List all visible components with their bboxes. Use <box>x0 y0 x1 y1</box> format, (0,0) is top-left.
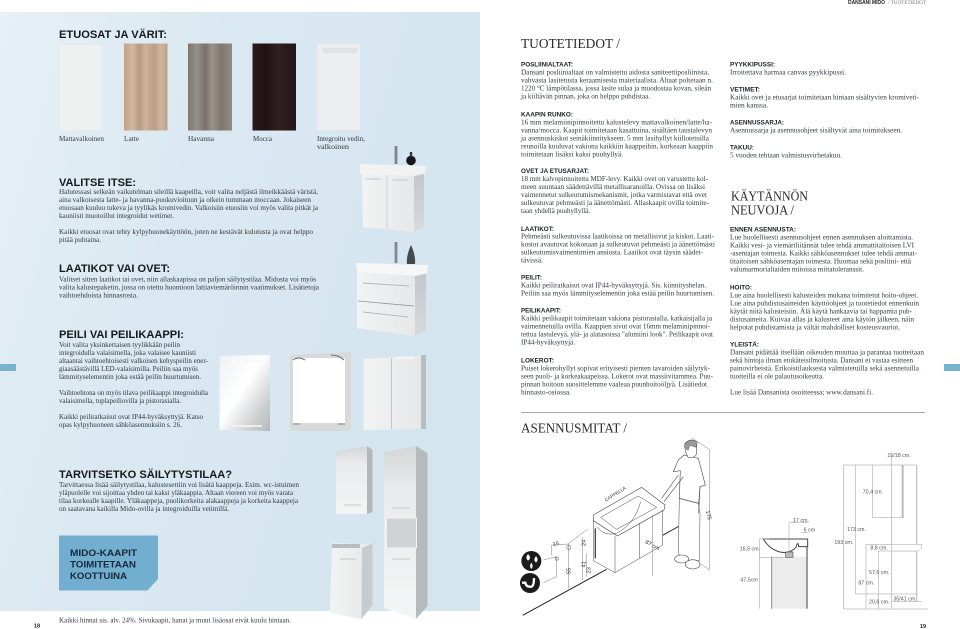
body text: pitää puhtaina. <box>59 235 101 244</box>
swatch labels: Mattavalkoinen <box>59 134 104 143</box>
ennen asennusta: Kaikki vesi- ja viemäriliitännät tulee tehdä ammattitaitoisen LVI <box>730 240 915 250</box>
swatch labels: Latte <box>124 134 139 143</box>
body text: Voit valita yksinkertaisen tyylikkään peilin <box>59 340 180 349</box>
body text: valita kalustepaketin, jossa on otettu huomioon lattiaviemäröinnin vaatimukset. Lisätietoja <box>59 282 320 292</box>
elevation labels: 87 cm. <box>858 581 874 587</box>
ovet ja etusarjat: sulkeutuvat pehmeästi ja äänettömästi. Allaskaapit ovilla toimite- <box>521 198 710 207</box>
yleistä: tuotteilla ei ole palautusoikeutta. <box>730 372 824 380</box>
body text: Kaikki etuosat ovat tehty kylpyhuonekäyttöön, joten ne kestävät kulutusta ja ovat helppo <box>59 227 313 236</box>
body text <box>59 274 320 300</box>
body text: valaisimella, tuplapeiliovilla ja pistorasialla. <box>59 396 181 405</box>
hoito: Lue aina huolellisesti kalusteiden mukana toimitetut hoito-ohjeet. <box>730 290 918 300</box>
laatikot: LAATIKOT: <box>521 226 554 233</box>
elevation labels: 20,6 cm. <box>869 599 889 605</box>
diagram: isometric installation with person <box>520 438 712 615</box>
dimension labels: CAPPELLA <box>604 485 628 503</box>
kaapin runko: KAAPIN RUNKO: <box>521 112 573 118</box>
peilikaapit: IP44-hyväksyttyjä. <box>521 338 575 346</box>
section: valitse itse <box>59 177 319 244</box>
dimension labels <box>552 485 712 574</box>
section labels: 47,5cm <box>740 577 758 583</box>
hoito: Lue aina puhdistusaineiden käyttöohjeet ja tuotetiedot ennenkuin <box>730 298 919 308</box>
ennen asennusta: valumarmorialtaiden mitoissa mittatoleranssit. <box>730 264 864 274</box>
floor line <box>523 526 679 615</box>
heading: tuotetiedot: TUOTETIEDOT / <box>521 37 620 52</box>
callout: mido-kaapit toimitetaan koottuina: TOIMITETAAN <box>70 560 136 570</box>
peilikaapit <box>521 308 713 346</box>
posliinialtaat: POSLIINIALTAAT: <box>521 62 573 68</box>
heading: PEILI VAI PEILIKAAPPI: <box>59 329 184 341</box>
lokerot: seen puoli- ja korkeakaapeissa. Lokerot ovat massiivitammea. Puu- <box>521 372 714 380</box>
elevation labels <box>834 453 917 605</box>
lokerot: LOKEROT: <box>521 358 554 364</box>
body text: vaihtoehdoista hinnastosta. <box>59 290 138 300</box>
heading: TARVITSETKO SÄILYTYSTILAA? <box>59 468 232 481</box>
yleistä: YLEISTÄ: <box>730 340 759 348</box>
dimension labels: 23 <box>587 567 593 573</box>
dimension labels: 24 <box>581 540 587 546</box>
swatch labels: valkoinen <box>317 142 349 151</box>
hoito: helpotat puhdistamista ja vältät mahdolliset kosteusvauriot. <box>730 322 900 332</box>
kaapin runko <box>520 112 713 158</box>
laatikot: tävissä. <box>521 256 543 264</box>
kaapin runko: toimitetaan lisäksi kaksi puuhyllyä. <box>521 150 623 158</box>
ovet ja etusarjat: 18 mm kalvopinnoitettu MDF-levy. Kaikki ovet on varustettu kol- <box>521 174 709 183</box>
body text: Vaihtoehtona on myös tilava peilikaappi integroidulla <box>59 388 209 397</box>
lokerot <box>521 358 714 396</box>
laatikot <box>521 226 715 264</box>
body text: on saatavana kaikilla Mido-ovilla ja integroiduilla vetimillä. <box>59 504 229 513</box>
practical advice column <box>730 226 924 396</box>
posliinialtaat: ja kiiltävän pinnan, joka on helppo puhdistaa. <box>520 92 650 100</box>
elevation labels: 8,8 cm. <box>870 546 888 552</box>
basin and cabinet <box>593 487 665 573</box>
peilit: PEILIT: <box>521 274 542 282</box>
kaapin runko: ja asennuskiskot seinäkiinnitykseen. 5 mm lasihyllyt kiillotetuilla <box>520 134 710 142</box>
asennussarja <box>730 120 902 134</box>
callout: mido-kaapit toimitetaan koottuina: KOOTTUINA <box>70 571 127 582</box>
body text: aina valkoisesta latte- ja havanna-puukuvioituun ja oikein tummaan moccaan. Jokaiseen <box>59 195 311 204</box>
section: peili vai peilikaappi <box>59 329 209 429</box>
swatch: havanna <box>188 44 232 130</box>
swatch: mocca <box>252 44 296 130</box>
image: mirror cabinet <box>364 355 426 430</box>
dimension labels: 55 <box>567 568 573 574</box>
dimension labels: 87 cm <box>644 539 660 552</box>
lokerot: pinnan hoitoon suosittelemme vaaleaa puunhoitoöljyä. Lisätiedot <box>521 380 707 388</box>
dimension lines <box>543 438 709 588</box>
section labels: 17 cm. <box>793 518 809 524</box>
running header <box>848 0 927 6</box>
image: vanity with doors <box>360 146 426 232</box>
heading: asennusmitat: ASENNUSMITAT / <box>521 422 627 436</box>
lokerot: hinnasto-osiossa. <box>521 388 571 396</box>
ovet ja etusarjat: meen suuntaan säädettävillä metallisaranoilla. Ovissa on lisäksi <box>521 182 705 191</box>
footer note: Kaikki hinnat sis. alv. 24%. Sivukaapit, hanat ja muut lisäosat eivät kuulu hintaan. <box>59 616 291 624</box>
yleistä: painovirheistä. Erikoistilauksesta valmistetuilla sekä asennetuilla <box>730 364 920 372</box>
diagram: side elevation and cross section <box>740 453 928 609</box>
body text: Valitset sitten laatikot tai ovet, niin allaskaapissa on paljon säilytystilaa. Midosta voi myös <box>59 274 316 284</box>
body text: etuosaan kuuluu tukeva ja tyylikäs kromivedin. Valkoisiin etuosiin voi myös valita pitkät ja <box>59 203 319 212</box>
swatch labels: Havanna <box>188 134 215 143</box>
image: mirror with light bars <box>220 355 270 431</box>
callout: mido-kaapit toimitetaan koottuina: MIDO-KAAPIT <box>70 548 137 559</box>
hoito <box>730 284 919 332</box>
body text: kauniisti muotoillut integroidut wetimet. <box>59 211 174 220</box>
body text: opas kylpyhuoneen sähköasennuksiin s. 26. <box>59 420 182 429</box>
body text: giaasäästävillä LED-valaisimilla. Peiliin saa myös <box>59 364 198 373</box>
ennen asennusta: ENNEN ASENNUSTA: <box>730 226 796 234</box>
posliinialtaat: vahvasta lasitetusta keraamisesta materiaalista. Altaat poltetaan n. <box>521 76 713 84</box>
section labels <box>740 518 816 583</box>
hoito: käytät niitä kalusteisiin. Älä käytä hankaavia tai happamia puh- <box>730 306 913 316</box>
vetimet: mien kanssa. <box>730 100 768 110</box>
body text: lämmityselementin joka estää peilin huurtumisen. <box>59 372 201 381</box>
takuu <box>730 144 842 160</box>
icon: drain pipe <box>520 573 540 593</box>
dimension labels: 175 <box>704 510 712 521</box>
panel: light blue left page background <box>0 12 480 611</box>
body text: tilaa korkealle kaapille. Yläkaappeja, puolikorkeita alakaappeja ja korkeita kaappeja <box>59 496 299 505</box>
vetimet <box>730 86 920 110</box>
dimension labels: 15 <box>552 541 560 548</box>
vetimet: Kaikki ovet ja etusarjat toimitetaan hintaan sisältyvien kromiveti- <box>730 92 920 102</box>
elevation labels: 15/18 cm. <box>887 453 911 459</box>
body text <box>59 480 299 513</box>
heading: käytännön neuvoja: NEUVOJA / <box>731 204 794 218</box>
yleistä: sekä hintoja ilman etukäteisilmoitusta. Dansani ei vastaa esitteen <box>730 356 913 364</box>
section labels: 6 cm <box>804 528 816 534</box>
section: etuosat ja värit <box>59 28 365 151</box>
yleistä: Lue lisää Dansanista osoitteessa; www.dansani.fi. <box>730 388 873 396</box>
pyykkipussi: Irroitettava harmaa canvas pyykkipussi. <box>730 68 846 76</box>
kaapin runko: vanna/mocca. Kaapit toimitetaan kasattuina, sisältäen taustalevyn <box>521 126 712 134</box>
icon: water drops <box>521 551 541 571</box>
takuu: 5 vuoden tehtaan valmistusvirhetakuu. <box>730 150 842 160</box>
peilit: Kaikki peiliratkaisut ovat IP44-hyväksyttyjä. Sis. kiinnityshelan. <box>521 280 706 290</box>
kaapin runko: reunoilla kuuluvat vakiona kaikkiin kaappeihin, korkeaan kaappiin <box>521 142 713 150</box>
section labels: 16,5 cm. <box>740 547 760 553</box>
column 1: product details <box>520 62 715 396</box>
swatch: latte <box>124 44 168 130</box>
heading: käytännön neuvoja: KÄYTÄNNÖN <box>731 188 808 204</box>
posliinialtaat <box>520 62 713 100</box>
takuu: TAKUU: <box>730 144 754 152</box>
image: framed mirror with lamps <box>290 352 351 431</box>
ovet ja etusarjat: taan yhdellä puuhyllyllä. <box>521 206 590 215</box>
heading: VALITSE ITSE: <box>59 177 136 189</box>
body text: Tarvittaessa lisää säilytystilaa, kalustesettiin voi lisätä kaappeja. Esim. wc-istuimen <box>59 480 299 489</box>
ovet ja etusarjat <box>521 168 710 215</box>
elevation labels: 193 cm. <box>834 540 853 546</box>
peilit <box>521 274 714 298</box>
body text: yläpuolelle voi sijoittaa yhden tai kaksi yläkaappia. Altaan viereen voi myös varata <box>59 488 294 497</box>
body text: Halutessasi selkeän vaikutelman sileillä kaapeilla, voit valita neljästä ilmeikkäästä väristä, <box>59 187 318 196</box>
elevation labels: 173 cm. <box>847 527 866 533</box>
image: tall cabinet with niche <box>384 446 428 619</box>
vetimet: VETIMET: <box>730 86 760 94</box>
image: vanity with drawers <box>356 242 428 336</box>
column 2: product details continued <box>730 62 920 160</box>
swatch: mattavalkoinen <box>60 45 102 130</box>
peilit: Peiliin saa myös lämmityselementin joka estää peilin huurtumisen. <box>521 288 714 298</box>
dimension labels: 41 <box>581 561 587 567</box>
peilikaapit: PEILIKAAPIT: <box>521 308 561 314</box>
swatch: integrated handle <box>317 44 360 130</box>
ennen asennusta: Lue huolellisesti asennusohjeet ennen asennuksen aloittamista. <box>730 232 913 242</box>
asennussarja: Asennussarja ja asennusohjeet sisältyvät aina toimitukseen. <box>730 126 902 134</box>
blue page tab left <box>0 364 16 371</box>
section: tarvitsetko säilytystilaa <box>59 468 299 513</box>
hoito: HOITO: <box>730 284 752 292</box>
yleistä <box>730 340 924 396</box>
callout: mido-kaapit toimitetaan koottuina <box>59 536 158 590</box>
peilikaapit: Kaikki peilikaapit toimitetaan vakiona pistorasialla, katkaisijalla ja <box>521 314 713 322</box>
elevation lines <box>843 455 928 609</box>
person <box>662 440 705 569</box>
section of basin <box>759 523 808 609</box>
swatch labels <box>59 134 365 151</box>
elevation labels: 70,4 cm. <box>863 489 883 495</box>
yleistä: Dansani pidättää itsellään oikeuden muuttaa ja parantaa tuotteitaan <box>730 348 924 356</box>
laatikot: kostot avautuvat kokonaan ja sulkeutuvat pehmeästi ja äänettömästi <box>521 240 715 248</box>
section: laatikot vai ovet <box>59 263 320 300</box>
body text: Kaikki peiliratkaisut ovat IP44-hyväksyttyjä. Katso <box>59 412 203 421</box>
ovet ja etusarjat: vaimennetut sulkeutumismekanismit, jotka varmistavat että ovet <box>521 190 707 199</box>
body text: integroidulla valaisimella, joka valaisee kauniisti <box>59 348 196 357</box>
body text <box>59 340 209 429</box>
heading: ETUOSAT JA VÄRIT: <box>59 28 167 41</box>
peilikaapit: tettua lastulevyä, ylä- ja alatasoissa "alumiini look". Peilikaapit ovat <box>521 330 713 338</box>
swatch labels: Mocca <box>253 134 273 143</box>
elevation labels: 35/41 cm. <box>893 597 917 603</box>
body text <box>59 187 319 244</box>
swatch labels: Integroitu vedin, <box>317 134 365 143</box>
kaapin runko: 16 mm melamiinipinnoitettu kalustelevy mattavalkoinen/latte/ha- <box>521 118 713 126</box>
blue page tab right <box>944 364 960 371</box>
heading: käytännön neuvoja <box>731 188 808 218</box>
elevation labels: 57,6 cm. <box>869 570 889 576</box>
laatikot: sulkeutumisvaimentimien ansiosta. Laatikot ovat täysin säädet- <box>521 248 704 256</box>
peilikaapit: vaimennetuilla ovilla. Kaappien sivut ovat 16mm melaminipinnoi- <box>521 322 711 330</box>
body text: altaantai vaihtoehtoisesti valkoisen kehyspeilin ener- <box>59 356 209 365</box>
ennen asennusta: titaitoisen sähköasentajan toimesta. Huomaa sekä posliini- että <box>730 256 912 266</box>
image: low cabinet <box>330 543 372 619</box>
hoito: distusaineita. Kuivaa allas ja kalusteet aina käytön jälkeen, näin <box>730 314 914 324</box>
posliinialtaat: 1220 °C lämpötilassa, jossa lasite sulaa ja muodostaa kovan, sileän <box>521 84 711 92</box>
pyykkipussi <box>730 62 846 76</box>
ennen asennusta <box>730 226 918 274</box>
ovet ja etusarjat: OVET JA ETUSARJAT: <box>521 168 589 175</box>
image: wall cabinet <box>336 446 372 514</box>
pyykkipussi: PYYKKIPUSSI: <box>730 62 775 68</box>
laatikot: Pehmeästi sulkeutuvissa laatikoissa on metallisivut ja kiskot. Laati- <box>521 232 715 240</box>
heading: LAATIKOT VAI OVET: <box>59 263 170 275</box>
asennussarja: ASENNUSSARJA: <box>730 120 784 126</box>
posliinialtaat: Dansani posliinialtaat on valmistettu aidosta saniteettiposliinista, <box>521 68 709 76</box>
lokerot: Puiset lokerohyllyt sopivat erityisesti pienten tavaroiden säilytyk- <box>521 364 711 372</box>
ennen asennusta: -asentajan toimesta. Kaikki sähköasennukset tulee tehdä ammat- <box>730 248 918 258</box>
